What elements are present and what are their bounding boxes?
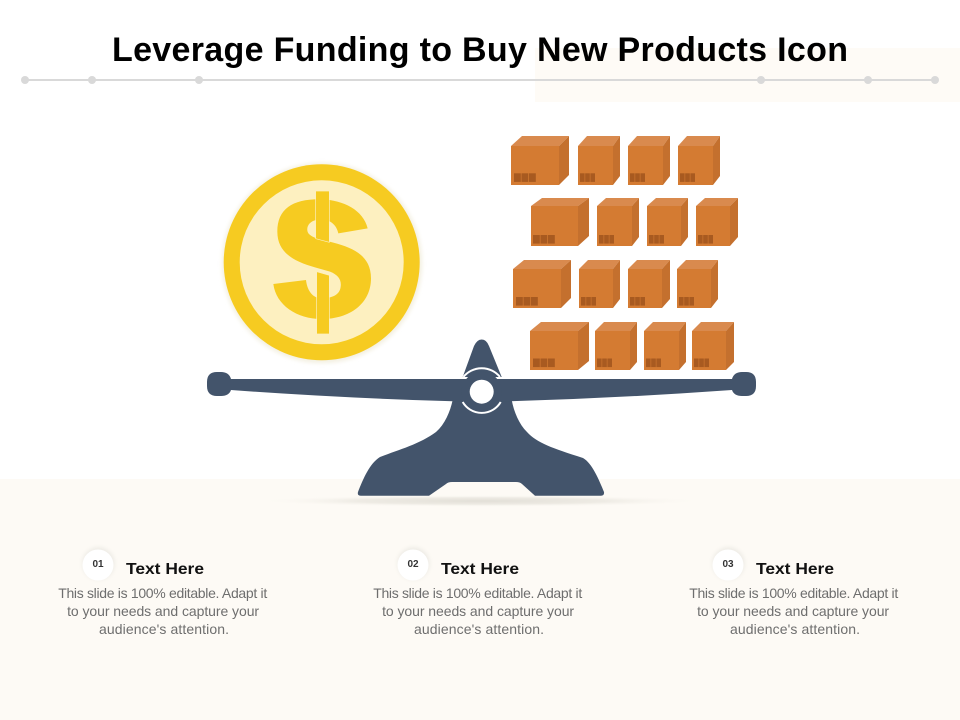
number badge 03: 03 [722, 559, 734, 570]
column 2 [373, 548, 586, 637]
background panel: top right [535, 48, 960, 102]
scale shadow [256, 495, 706, 507]
body text: to your needs and capture your [697, 603, 889, 619]
column 3 [689, 548, 902, 637]
number badge 01: 01 [92, 559, 104, 570]
number badge 02 [398, 548, 430, 580]
body text: audience's attention. [730, 621, 860, 637]
icon: stacked cardboard boxes [511, 136, 738, 370]
body text: This slide is 100% editable. Adapt it [373, 585, 582, 601]
number badge 02: 02 [407, 559, 419, 570]
number badge 03 [712, 548, 744, 580]
icon: balance scale [207, 340, 756, 496]
body text: audience's attention. [99, 621, 229, 637]
heading: Text Here [441, 561, 519, 578]
scale base [358, 400, 604, 496]
scale top cone [463, 340, 502, 377]
row 4 boxes [530, 322, 734, 370]
row 2 boxes [531, 198, 738, 246]
title: Leverage Funding to Buy New Products Icon [112, 31, 848, 69]
heading: Text Here [126, 561, 204, 578]
row 3 boxes [513, 260, 718, 308]
icon: gold coin with dollar sign [222, 163, 422, 363]
row 1 boxes [511, 136, 720, 185]
number badge 01 [82, 548, 114, 580]
column 1 [58, 548, 271, 637]
body text: audience's attention. [414, 621, 544, 637]
scale pivot [462, 368, 502, 413]
body text: This slide is 100% editable. Adapt it [689, 585, 898, 601]
scale beam [207, 372, 756, 401]
body text: to your needs and capture your [67, 603, 259, 619]
timeline rule with dots [21, 76, 939, 84]
body text: This slide is 100% editable. Adapt it [58, 585, 267, 601]
background panel: bottom [0, 479, 960, 720]
heading: Text Here [756, 561, 834, 578]
body text: to your needs and capture your [382, 603, 574, 619]
